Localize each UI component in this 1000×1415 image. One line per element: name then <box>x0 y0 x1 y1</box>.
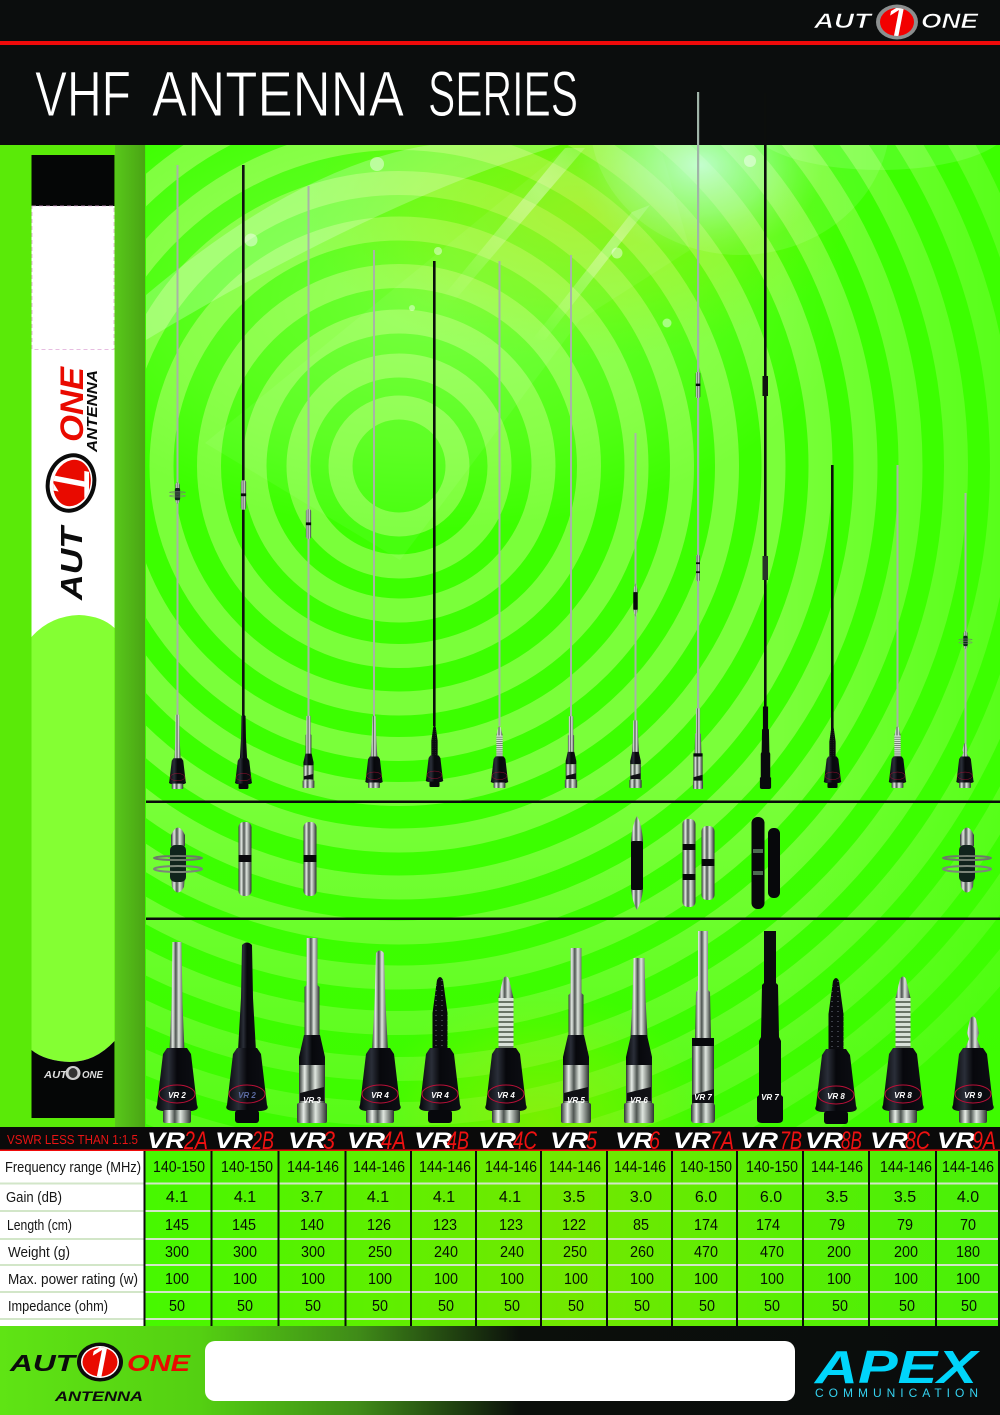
logo: APEX Communication <box>814 1341 980 1400</box>
antenna: VR9A full <box>956 493 974 788</box>
row: gain: 6.0 <box>760 1189 782 1206</box>
row labels: Gain (dB) <box>6 1190 62 1206</box>
base: VR2A <box>156 942 198 1123</box>
row: frequency range: 144-146 <box>549 1159 601 1176</box>
antenna: VR3 full <box>303 186 314 788</box>
base: VR4C: VR 4 <box>497 1091 515 1100</box>
antenna: VR8B full <box>824 465 841 788</box>
row: max power: 100 <box>368 1271 392 1288</box>
bokeh dots <box>244 155 756 328</box>
row: max power: 100 <box>956 1271 980 1288</box>
table header band <box>0 1127 1000 1155</box>
base: VR5: VR 5 <box>567 1096 585 1105</box>
base: VR4B <box>419 977 461 1123</box>
base: VR2B <box>226 942 268 1123</box>
row: length: 85 <box>633 1217 649 1234</box>
row: frequency range: 144-146 <box>880 1159 932 1176</box>
row: frequency range: 144-146 <box>614 1159 666 1176</box>
row: length: 126 <box>367 1217 391 1234</box>
row: base close-ups <box>156 931 994 1124</box>
logo: vertical AUTO ONE ANTENNA <box>46 366 97 601</box>
logo: vertical AUTO ONE ANTENNA: ANTENNA <box>84 370 101 453</box>
base: VR6: VR 6 <box>630 1096 648 1105</box>
row: weight: 300 <box>301 1244 325 1261</box>
model names: VR <box>414 1128 452 1153</box>
row labels: Impedance (ohm) <box>8 1299 108 1315</box>
row: gain: 3.5 <box>826 1189 848 1206</box>
base: VR8B <box>815 978 857 1124</box>
row: weight: 240 <box>500 1244 524 1261</box>
model names: 4A <box>381 1127 406 1155</box>
antenna: VR7B full <box>760 93 771 789</box>
row: frequency range: 144-146 <box>485 1159 537 1176</box>
row: impedance: 50 <box>438 1298 454 1315</box>
antenna: VR6 full <box>629 433 642 788</box>
row: length: 174 <box>756 1217 780 1234</box>
coil: VR2A <box>154 828 202 892</box>
antenna: VR4B full <box>426 261 443 787</box>
row: max power: 100 <box>827 1271 851 1288</box>
antenna: VR2A full <box>169 165 186 789</box>
row: impedance: 50 <box>699 1298 715 1315</box>
base: VR2A: VR 2 <box>168 1091 186 1100</box>
row: max power: 100 <box>165 1271 189 1288</box>
logo: APEX Communication: COMMUNICATION <box>815 1386 978 1400</box>
base: VR4C <box>485 976 527 1123</box>
model names: 5 <box>586 1127 597 1155</box>
base: VR3: VR 3 <box>303 1096 321 1105</box>
row: gain: 3.5 <box>563 1189 585 1206</box>
coil: VR3 <box>304 822 316 896</box>
row: weight: 260 <box>630 1244 654 1261</box>
logo: AUTO ONE ANTENNA footer: ONE <box>127 1350 191 1376</box>
logo: small banner logo <box>43 1066 103 1081</box>
antenna: VR7A full <box>693 92 703 789</box>
row: impedance: 50 <box>305 1298 321 1315</box>
row: frequency range: 140-150 <box>221 1159 273 1176</box>
coil: VR9A <box>943 828 991 892</box>
model names: 2B <box>251 1127 274 1155</box>
white blank panel <box>205 1341 795 1401</box>
model names: VR <box>347 1128 385 1153</box>
row: max power: 100 <box>434 1271 458 1288</box>
row: impedance: 50 <box>634 1298 650 1315</box>
model names: 4C <box>513 1127 538 1155</box>
row: weight: 200 <box>827 1244 851 1261</box>
row: max power: 100 <box>630 1271 654 1288</box>
row: gain: 6.0 <box>695 1189 717 1206</box>
base: VR9A <box>952 1016 994 1123</box>
coil: VR7B upper <box>752 817 764 909</box>
row: frequency range: 140-150 <box>153 1159 205 1176</box>
row: length: 145 <box>165 1217 189 1234</box>
row: length: 122 <box>562 1217 586 1234</box>
row: weight: 250 <box>368 1244 392 1261</box>
row: frequency range: 140-150 <box>680 1159 732 1176</box>
model names: VR <box>615 1128 653 1153</box>
row labels: Frequency range (MHz) <box>5 1160 141 1176</box>
row: impedance: 50 <box>237 1298 253 1315</box>
base: VR5 <box>561 948 591 1123</box>
model names: VR <box>288 1128 326 1153</box>
model names: VR <box>478 1128 516 1153</box>
row: gain: 3.0 <box>630 1189 652 1206</box>
row: frequency range <box>153 1159 994 1176</box>
logo: AUTO ONE header: AUT <box>813 10 874 33</box>
row: max power: 100 <box>694 1271 718 1288</box>
row: weight: 240 <box>434 1244 458 1261</box>
row: length: 174 <box>694 1217 718 1234</box>
base: VR3 <box>297 938 327 1123</box>
title: VHF <box>35 58 131 130</box>
row: gain: 4.1 <box>166 1189 188 1206</box>
model names: 7B <box>780 1127 802 1155</box>
row: impedance: 50 <box>899 1298 915 1315</box>
panel: footer <box>0 1326 1000 1415</box>
row: coil details <box>154 816 991 910</box>
row: weight: 300 <box>233 1244 257 1261</box>
row: frequency range: 144-146 <box>811 1159 863 1176</box>
title: SERIES <box>428 58 578 130</box>
base: VR7B <box>757 931 783 1123</box>
row: weight: 180 <box>956 1244 980 1261</box>
base: VR8C <box>882 976 924 1123</box>
model names: 8C <box>905 1127 931 1155</box>
logo: AUTO ONE header: ONE <box>921 10 979 33</box>
coil: VR6 <box>631 816 643 910</box>
model names: 6 <box>649 1127 660 1155</box>
panel: left green sidebar <box>0 145 146 1128</box>
base: VR2B: VR 2 <box>238 1091 256 1100</box>
row: max power <box>165 1271 980 1288</box>
row labels <box>5 1160 141 1315</box>
base: VR4A: VR 4 <box>371 1091 389 1100</box>
logo: AUTO ONE header <box>814 4 978 40</box>
antenna: VR2B full <box>235 165 252 789</box>
logo: vertical AUTO ONE ANTENNA: ONE <box>54 365 90 442</box>
logo: AUTO ONE ANTENNA footer: 1 <box>86 1335 114 1393</box>
model names: VR <box>805 1128 843 1153</box>
row: weight: 250 <box>563 1244 587 1261</box>
row: gain: 4.1 <box>499 1189 521 1206</box>
row: gain: 3.5 <box>894 1189 916 1206</box>
antenna: VR4C full <box>491 261 508 788</box>
coil: VR7A upper <box>682 819 696 907</box>
antenna: VR4A full <box>365 250 383 788</box>
model names: VR <box>147 1128 185 1153</box>
row: max power: 100 <box>233 1271 257 1288</box>
header band <box>0 0 1000 145</box>
row: gain: 4.1 <box>367 1189 389 1206</box>
table: specifications <box>0 1151 1000 1326</box>
row labels: Length (cm) <box>7 1218 72 1234</box>
logo: small banner logo: AUT <box>43 1070 68 1081</box>
row: max power: 100 <box>564 1271 588 1288</box>
row: impedance: 50 <box>504 1298 520 1315</box>
row: max power: 100 <box>301 1271 325 1288</box>
row: frequency range: 144-146 <box>419 1159 471 1176</box>
row: max power: 100 <box>760 1271 784 1288</box>
row: length: 79 <box>829 1217 845 1234</box>
base: VR4A <box>359 950 401 1123</box>
coil: VR7A lower <box>702 826 714 900</box>
antenna: VR8C full <box>889 465 906 788</box>
panel: green ring background <box>146 145 1000 1127</box>
row: length: 79 <box>897 1217 913 1234</box>
row labels: Weight (g) <box>8 1245 70 1261</box>
row: length: 123 <box>499 1217 523 1234</box>
model names: 3 <box>323 1127 335 1155</box>
row: weight: 470 <box>694 1244 718 1261</box>
row: frequency range: 144-146 <box>287 1159 339 1176</box>
logo: vertical AUTO ONE ANTENNA: 1 <box>34 466 103 500</box>
model names: 4B <box>447 1127 469 1155</box>
base: VR7B: VR 7 <box>761 1093 779 1102</box>
base: VR7A <box>691 931 715 1123</box>
model names: VR <box>870 1128 908 1153</box>
model names: VR <box>215 1128 253 1153</box>
light swoosh <box>146 145 560 340</box>
model names: VR <box>550 1128 588 1153</box>
base: VR4B: VR 4 <box>431 1091 449 1100</box>
base: VR8B: VR 8 <box>827 1092 845 1101</box>
row: gain: 4.0 <box>957 1189 979 1206</box>
logo: vertical AUTO ONE ANTENNA: AUT <box>54 523 89 601</box>
row: impedance: 50 <box>832 1298 848 1315</box>
row: length <box>165 1217 976 1234</box>
row: impedance: 50 <box>372 1298 388 1315</box>
row: impedance: 50 <box>568 1298 584 1315</box>
row: full antennas <box>169 92 974 789</box>
base: VR8C: VR 8 <box>894 1091 912 1100</box>
row: impedance: 50 <box>961 1298 977 1315</box>
row: length: 140 <box>300 1217 324 1234</box>
row: weight: 470 <box>760 1244 784 1261</box>
row: weight: 200 <box>894 1244 918 1261</box>
coil: VR2B <box>238 822 252 896</box>
model names <box>147 1127 996 1155</box>
coil: VR7B lower <box>768 828 780 898</box>
model names: VR <box>740 1128 778 1153</box>
row: length: 123 <box>433 1217 457 1234</box>
model names: 7A <box>710 1127 734 1155</box>
row: impedance: 50 <box>764 1298 780 1315</box>
logo: AUTO ONE ANTENNA footer <box>9 1342 191 1401</box>
row: frequency range: 144-146 <box>353 1159 405 1176</box>
model names: VR <box>673 1128 711 1153</box>
panel: vertical banner <box>32 155 114 1118</box>
row: length: 70 <box>960 1217 976 1234</box>
base: VR7A: VR 7 <box>694 1093 712 1102</box>
row: length: 145 <box>232 1217 256 1234</box>
row: gain: 4.1 <box>433 1189 455 1206</box>
model names: 2A <box>183 1127 208 1155</box>
section dividers <box>146 800 1000 920</box>
logo: APEX Communication: APEX <box>814 1341 980 1393</box>
antenna: VR5 full <box>565 255 577 788</box>
row: frequency range: 144-146 <box>942 1159 994 1176</box>
logo: AUTO ONE ANTENNA footer: AUT <box>9 1350 78 1376</box>
base: VR6 <box>624 958 654 1123</box>
row: weight: 300 <box>165 1244 189 1261</box>
row: gain <box>166 1189 979 1206</box>
title: ANTENNA <box>152 58 404 130</box>
base: VR9A: VR 9 <box>964 1091 982 1100</box>
logo: AUTO ONE ANTENNA footer: ANTENNA <box>54 1388 143 1404</box>
model names: VR <box>937 1128 975 1153</box>
row: gain: 4.1 <box>234 1189 256 1206</box>
logo: small banner logo: ONE <box>82 1070 103 1081</box>
model names: 8B <box>841 1127 862 1155</box>
title <box>35 58 578 130</box>
row: impedance: 50 <box>169 1298 185 1315</box>
row: gain: 3.7 <box>301 1189 323 1206</box>
label: VSWR: VSWR LESS THAN 1:1.5 <box>7 1132 138 1147</box>
row: weight <box>165 1244 980 1261</box>
row labels: Max. power rating (w) <box>8 1272 138 1288</box>
row: max power: 100 <box>500 1271 524 1288</box>
row: frequency range: 140-150 <box>746 1159 798 1176</box>
row: max power: 100 <box>894 1271 918 1288</box>
row: impedance <box>169 1298 977 1315</box>
